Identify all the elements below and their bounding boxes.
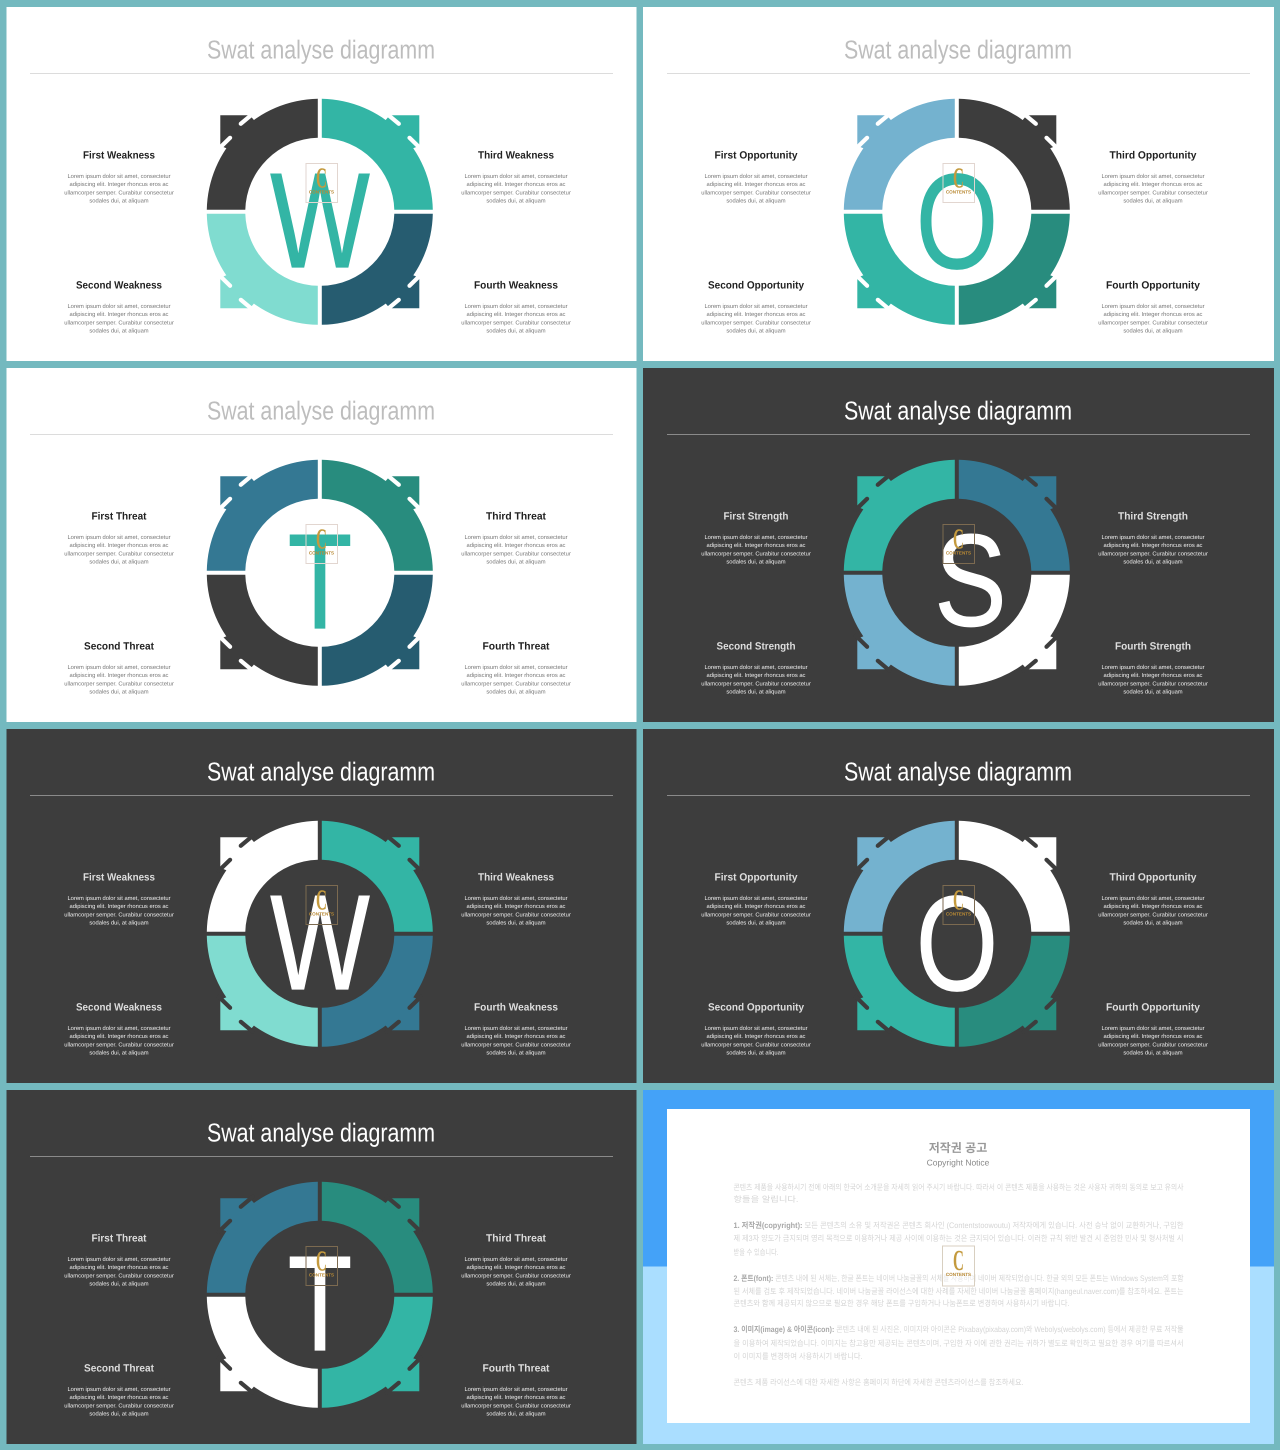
watermark: C bbox=[316, 1246, 327, 1278]
text: third opportunity: adipiscing elit. Integer rhoncus eros ac bbox=[1104, 181, 1203, 188]
text: second opportunity bbox=[701, 1002, 811, 1057]
text: image and icon section: 이 이미지를 변경하여 사용하시기 바랍니다. bbox=[734, 1352, 862, 1361]
text: second threat: adipiscing elit. Integer rhoncus eros ac bbox=[70, 1394, 169, 1401]
text: fourth threat: ullamcorper semper. Curabitur consectetur bbox=[461, 1402, 571, 1409]
text: third threat: adipiscing elit. Integer rhoncus eros ac bbox=[467, 542, 566, 549]
text: image and icon section: 을 이용하여 제작되었습니다. 이미지는 참고용만 제공되는 콘텐츠이며, 구입한 자 이에 관한 권리는 귀하가 별도로 확인하고 필요한 경우 여기를 따르셔서 bbox=[734, 1339, 1184, 1348]
text: fourth strength: adipiscing elit. Integer rhoncus eros ac bbox=[1104, 672, 1203, 679]
panel: O opportunity light bbox=[643, 7, 1274, 361]
text: fourth strength: sodales dui, at aliquam bbox=[1123, 689, 1183, 696]
text: fourth weakness: ullamcorper semper. Curabitur consectetur bbox=[461, 319, 571, 326]
text: third weakness: adipiscing elit. Integer rhoncus eros ac bbox=[467, 181, 566, 188]
ring diagram bbox=[844, 460, 1070, 686]
text: third strength: ullamcorper semper. Curabitur consectetur bbox=[1098, 550, 1208, 557]
text: fourth threat: adipiscing elit. Integer rhoncus eros ac bbox=[467, 1394, 566, 1401]
text: first strength: ullamcorper semper. Curabitur consectetur bbox=[701, 550, 811, 557]
text: third strength: Third Strength bbox=[1118, 510, 1188, 522]
text: first opportunity: First Opportunity bbox=[714, 150, 798, 162]
text: third opportunity: Third Opportunity bbox=[1110, 872, 1197, 884]
letter W: W bbox=[270, 145, 370, 296]
text: fourth opportunity: Lorem ipsum dolor sit amet, consectetur bbox=[1101, 303, 1205, 310]
text: second opportunity: sodales dui, at aliquam bbox=[726, 1050, 786, 1057]
text: first threat: Lorem ipsum dolor sit amet, consectetur bbox=[67, 1256, 171, 1263]
title: Swat analyse diagramm bbox=[207, 396, 435, 426]
text: first weakness: sodales dui, at aliquam bbox=[89, 198, 149, 205]
text: third weakness: ullamcorper semper. Curabitur consectetur bbox=[461, 189, 571, 196]
text: fourth opportunity: sodales dui, at aliquam bbox=[1123, 328, 1183, 335]
watermark bbox=[943, 162, 974, 202]
text: second weakness: Lorem ipsum dolor sit amet, consectetur bbox=[67, 1025, 171, 1032]
text: image and icon section: 3. 이미지(image) & 아이콘(icon): 콘텐츠 내에 된 사진은, 이미지와 아이콘은 Pixabay(pixabay.com)와 Webolys(webolys.com) 등에서 제공한 무료 저작물 bbox=[734, 1325, 1184, 1334]
text: third threat: sodales dui, at aliquam bbox=[486, 559, 546, 566]
text: second strength: Lorem ipsum dolor sit amet, consectetur bbox=[704, 664, 808, 671]
ring diagram bbox=[207, 99, 433, 325]
watermark: CONTENTS bbox=[309, 1272, 334, 1278]
watermark: CONTENTS bbox=[309, 912, 334, 916]
letter W: W bbox=[270, 867, 370, 1018]
text: second weakness bbox=[64, 280, 174, 335]
text: intro: 콘텐츠 제품을 사용하시기 전에 아래의 한국어 소개문을 자세히 읽어 주시기 바랍니다. 따라서 이 콘텐츠 제품을 사용하는 것은 사용자 귀하의 동의로 보고 유의사 bbox=[734, 1183, 1184, 1192]
text: first opportunity: ullamcorper semper. Curabitur consectetur bbox=[701, 911, 811, 918]
text: third threat: adipiscing elit. Integer rhoncus eros ac bbox=[467, 1264, 566, 1271]
text: first threat: First Threat bbox=[92, 510, 147, 522]
title: Swat analyse diagramm bbox=[844, 396, 1072, 426]
text: first opportunity bbox=[701, 872, 811, 927]
text: first threat bbox=[64, 510, 174, 566]
text: fourth threat: Lorem ipsum dolor sit amet, consectetur bbox=[464, 1386, 568, 1393]
text: third opportunity bbox=[1098, 150, 1208, 205]
text: third opportunity: ullamcorper semper. Curabitur consectetur bbox=[1098, 189, 1208, 196]
text: second weakness: sodales dui, at aliquam bbox=[89, 1050, 149, 1057]
text: second threat: sodales dui, at aliquam bbox=[89, 689, 149, 696]
text: fourth strength: ullamcorper semper. Curabitur consectetur bbox=[1098, 680, 1208, 687]
text: first opportunity bbox=[701, 150, 811, 205]
text: third weakness: Third Weakness bbox=[478, 872, 554, 884]
text: first threat bbox=[64, 1232, 174, 1288]
text: fourth strength bbox=[1098, 640, 1208, 696]
ring diagram bbox=[207, 460, 433, 686]
text: first opportunity: Lorem ipsum dolor sit amet, consectetur bbox=[704, 895, 808, 902]
text: third opportunity: Lorem ipsum dolor sit amet, consectetur bbox=[1101, 895, 1205, 902]
text: fourth threat bbox=[461, 1362, 571, 1418]
letter O: O bbox=[916, 146, 998, 297]
text: first weakness: ullamcorper semper. Curabitur consectetur bbox=[64, 911, 174, 918]
text: third weakness: Lorem ipsum dolor sit amet, consectetur bbox=[464, 895, 568, 902]
text: third strength: sodales dui, at aliquam bbox=[1123, 559, 1183, 566]
text: first opportunity: Lorem ipsum dolor sit amet, consectetur bbox=[704, 173, 808, 180]
text: first weakness: adipiscing elit. Integer rhoncus eros ac bbox=[70, 181, 169, 188]
text: second opportunity: Second Opportunity bbox=[708, 1002, 804, 1014]
text: fourth strength: Lorem ipsum dolor sit amet, consectetur bbox=[1101, 664, 1205, 671]
text: first weakness bbox=[64, 872, 174, 927]
watermark bbox=[306, 1246, 338, 1286]
text: second threat: adipiscing elit. Integer rhoncus eros ac bbox=[70, 672, 169, 679]
text: second threat: ullamcorper semper. Curabitur consectetur bbox=[64, 1402, 174, 1409]
text: first weakness: First Weakness bbox=[83, 150, 155, 162]
text: third strength: Lorem ipsum dolor sit amet, consectetur bbox=[1101, 534, 1205, 541]
text: intro bbox=[734, 1183, 1184, 1204]
text: third weakness bbox=[461, 150, 571, 205]
text: second opportunity: ullamcorper semper. Curabitur consectetur bbox=[701, 1041, 811, 1048]
panel: W weakness light bbox=[6, 7, 636, 361]
text: fourth strength: Fourth Strength bbox=[1115, 640, 1191, 652]
panel: S strength dark bbox=[643, 368, 1274, 722]
text: fourth weakness bbox=[461, 280, 571, 335]
panel: copyright notice bbox=[643, 1090, 1274, 1444]
watermark bbox=[306, 524, 338, 564]
text: second threat: ullamcorper semper. Curabitur consectetur bbox=[64, 680, 174, 687]
watermark: CONTENTS bbox=[946, 550, 971, 556]
text: fourth opportunity: Fourth Opportunity bbox=[1106, 1002, 1200, 1014]
heading: copyright notice: Copyright Notice bbox=[927, 1158, 990, 1168]
text: first strength: First Strength bbox=[724, 510, 788, 522]
watermark bbox=[306, 884, 338, 924]
text: intro: 항들을 알립니다. bbox=[734, 1195, 798, 1204]
text: third threat: ullamcorper semper. Curabitur consectetur bbox=[461, 1272, 571, 1279]
text: fourth opportunity: ullamcorper semper. Curabitur consectetur bbox=[1098, 319, 1208, 326]
text: second opportunity: adipiscing elit. Integer rhoncus eros ac bbox=[707, 1033, 806, 1040]
text: first weakness: sodales dui, at aliquam bbox=[89, 920, 149, 927]
text: first threat: adipiscing elit. Integer rhoncus eros ac bbox=[70, 542, 169, 549]
watermark: C bbox=[953, 524, 964, 556]
text: first strength bbox=[701, 510, 811, 566]
text: fourth threat: sodales dui, at aliquam bbox=[486, 1411, 546, 1418]
letter O: O bbox=[916, 868, 998, 1019]
text: fourth threat: ullamcorper semper. Curabitur consectetur bbox=[461, 680, 571, 687]
text: second threat bbox=[64, 640, 174, 696]
panel: O opportunity dark bbox=[643, 729, 1274, 1083]
title: Swat analyse diagramm bbox=[844, 34, 1072, 64]
panel: T threat dark bbox=[6, 1090, 636, 1444]
text: third threat: ullamcorper semper. Curabitur consectetur bbox=[461, 550, 571, 557]
text: third strength: adipiscing elit. Integer rhoncus eros ac bbox=[1104, 542, 1203, 549]
text: third threat: Lorem ipsum dolor sit amet, consectetur bbox=[464, 534, 568, 541]
text: second weakness bbox=[64, 1002, 174, 1057]
text: third opportunity: Lorem ipsum dolor sit amet, consectetur bbox=[1101, 173, 1205, 180]
text: first threat: adipiscing elit. Integer rhoncus eros ac bbox=[70, 1264, 169, 1271]
text: second strength: sodales dui, at aliquam bbox=[726, 689, 786, 696]
text: third opportunity: Third Opportunity bbox=[1110, 150, 1197, 162]
text: fourth weakness: sodales dui, at aliquam bbox=[486, 328, 546, 335]
text: fourth weakness: Fourth Weakness bbox=[474, 280, 558, 292]
text: copyright section: 제 제3자 양도가 금지되며 영리 목적으로 이용하거나 제공 사이에 이용하는 것은 금지되어 있습니다. 이러한 규칙 위반 발견 시 준엄한 민사 및 형사처벌 시 bbox=[734, 1234, 1184, 1243]
text: first weakness: Lorem ipsum dolor sit amet, consectetur bbox=[67, 895, 171, 902]
ring diagram bbox=[844, 821, 1070, 1047]
text: second threat: Lorem ipsum dolor sit amet, consectetur bbox=[67, 664, 171, 671]
text: third threat: Third Threat bbox=[486, 1232, 546, 1244]
text: fourth opportunity: adipiscing elit. Integer rhoncus eros ac bbox=[1104, 311, 1203, 318]
title: Swat analyse diagramm bbox=[207, 34, 435, 64]
text: second weakness: adipiscing elit. Integer rhoncus eros ac bbox=[70, 311, 169, 318]
watermark bbox=[943, 524, 974, 564]
text: first weakness: adipiscing elit. Integer rhoncus eros ac bbox=[70, 903, 169, 910]
text: third threat: sodales dui, at aliquam bbox=[486, 1281, 546, 1288]
text: first opportunity: adipiscing elit. Integer rhoncus eros ac bbox=[707, 181, 806, 188]
text: closing line: 콘텐츠 제품 라이선스에 대한 자세한 사항은 홈페이지 하단에 자세한 콘텐츠라이선스를 참조하세요. bbox=[734, 1378, 1024, 1387]
text: second weakness: sodales dui, at aliquam bbox=[89, 328, 149, 335]
text: second weakness: adipiscing elit. Integer rhoncus eros ac bbox=[70, 1033, 169, 1040]
watermark: C bbox=[316, 524, 327, 556]
text: copyright section: 받을 수 있습니다. bbox=[734, 1248, 778, 1257]
watermark: C bbox=[316, 162, 327, 194]
watermark: CONTENTS bbox=[309, 550, 334, 556]
text: font section: 콘텐츠와 함께 제공되지 않으므로 필요한 경우 해당 폰트를 구입하거나 나눔폰트로 변경하여 사용하시기 바랍니다. bbox=[734, 1299, 1070, 1308]
text: second strength: Second Strength bbox=[716, 640, 796, 652]
text: fourth threat: adipiscing elit. Integer rhoncus eros ac bbox=[467, 672, 566, 679]
text: second weakness: ullamcorper semper. Curabitur consectetur bbox=[64, 319, 174, 326]
text: third weakness: Lorem ipsum dolor sit amet, consectetur bbox=[464, 173, 568, 180]
text: second opportunity: Lorem ipsum dolor sit amet, consectetur bbox=[704, 1025, 808, 1032]
text: first opportunity: sodales dui, at aliquam bbox=[726, 920, 786, 927]
text: first threat: ullamcorper semper. Curabitur consectetur bbox=[64, 550, 174, 557]
text: third threat bbox=[461, 1232, 571, 1288]
text: fourth threat: Fourth Threat bbox=[482, 640, 550, 652]
text: first strength: sodales dui, at aliquam bbox=[726, 559, 786, 566]
watermark bbox=[942, 1245, 974, 1286]
panel: W weakness dark bbox=[6, 729, 636, 1083]
text: second opportunity: ullamcorper semper. Curabitur consectetur bbox=[701, 319, 811, 326]
text: second strength: ullamcorper semper. Curabitur consectetur bbox=[701, 680, 811, 687]
text: third opportunity: sodales dui, at aliquam bbox=[1123, 198, 1183, 205]
watermark: CONTENTS bbox=[946, 190, 971, 194]
text: first strength: Lorem ipsum dolor sit amet, consectetur bbox=[704, 534, 808, 541]
text: second threat: Second Threat bbox=[84, 1362, 154, 1374]
watermark bbox=[943, 884, 974, 924]
text: font section: 된 서체를 검토 후 제작되었습니다. 네이버 나눔글꼴 라이선스에 대한 사례를 자세한 네이버 나눔글꼴 홈페이지(hangeul.naver.com)를 참조하세요. 폰트는 bbox=[734, 1287, 1184, 1296]
text: second weakness: ullamcorper semper. Curabitur consectetur bbox=[64, 1041, 174, 1048]
watermark: CONTENTS bbox=[946, 912, 971, 916]
text: third opportunity: ullamcorper semper. Curabitur consectetur bbox=[1098, 911, 1208, 918]
text: fourth weakness: adipiscing elit. Integer rhoncus eros ac bbox=[467, 1033, 566, 1040]
ring diagram bbox=[207, 1182, 433, 1408]
text: third weakness: sodales dui, at aliquam bbox=[486, 920, 546, 927]
letter T: T bbox=[288, 1228, 352, 1379]
text: fourth weakness: ullamcorper semper. Curabitur consectetur bbox=[461, 1041, 571, 1048]
text: second opportunity: Lorem ipsum dolor sit amet, consectetur bbox=[704, 303, 808, 310]
text: second threat: sodales dui, at aliquam bbox=[89, 1411, 149, 1418]
watermark: C bbox=[953, 162, 964, 194]
title: Swat analyse diagramm bbox=[207, 1118, 435, 1148]
text: fourth opportunity: sodales dui, at aliquam bbox=[1123, 1050, 1183, 1057]
text: second strength: adipiscing elit. Integer rhoncus eros ac bbox=[707, 672, 806, 679]
text: third weakness: Third Weakness bbox=[478, 150, 554, 162]
text: second threat: Second Threat bbox=[84, 640, 154, 652]
text: third threat: Lorem ipsum dolor sit amet, consectetur bbox=[464, 1256, 568, 1263]
watermark: C bbox=[953, 1245, 964, 1277]
panel: T threat light bbox=[6, 368, 636, 722]
text: second threat bbox=[64, 1362, 174, 1418]
ring diagram bbox=[207, 821, 433, 1047]
text: first threat: sodales dui, at aliquam bbox=[89, 1281, 149, 1288]
text: fourth threat bbox=[461, 640, 571, 696]
text: fourth weakness: adipiscing elit. Integer rhoncus eros ac bbox=[467, 311, 566, 318]
text: second weakness: Second Weakness bbox=[76, 280, 162, 292]
text: fourth opportunity: Lorem ipsum dolor sit amet, consectetur bbox=[1101, 1025, 1205, 1032]
text: first weakness: ullamcorper semper. Curabitur consectetur bbox=[64, 189, 174, 196]
text: first weakness bbox=[64, 150, 174, 205]
text: fourth weakness: Lorem ipsum dolor sit amet, consectetur bbox=[464, 303, 568, 310]
text: first threat: Lorem ipsum dolor sit amet, consectetur bbox=[67, 534, 171, 541]
text: fourth weakness: Fourth Weakness bbox=[474, 1002, 558, 1014]
letter S: S bbox=[934, 507, 1007, 654]
text: first opportunity: adipiscing elit. Integer rhoncus eros ac bbox=[707, 903, 806, 910]
text: first threat: First Threat bbox=[92, 1232, 147, 1244]
text: second opportunity: Second Opportunity bbox=[708, 280, 804, 292]
text: first weakness: Lorem ipsum dolor sit amet, consectetur bbox=[67, 173, 171, 180]
text: copyright section bbox=[734, 1221, 1184, 1257]
text: first strength: adipiscing elit. Integer rhoncus eros ac bbox=[707, 542, 806, 549]
text: second strength bbox=[701, 640, 811, 696]
watermark: CONTENTS bbox=[309, 190, 334, 194]
heading: korean title: 저작권 공고 bbox=[929, 1141, 987, 1155]
text: first threat: ullamcorper semper. Curabitur consectetur bbox=[64, 1272, 174, 1279]
text: first opportunity: ullamcorper semper. Curabitur consectetur bbox=[701, 189, 811, 196]
text: fourth threat: Lorem ipsum dolor sit amet, consectetur bbox=[464, 664, 568, 671]
text: third weakness bbox=[461, 872, 571, 927]
text: first opportunity: First Opportunity bbox=[714, 872, 798, 884]
text: fourth weakness bbox=[461, 1002, 571, 1057]
text: third threat bbox=[461, 510, 571, 566]
text: third opportunity: adipiscing elit. Integer rhoncus eros ac bbox=[1104, 903, 1203, 910]
text: fourth opportunity bbox=[1098, 280, 1208, 335]
text: fourth opportunity: Fourth Opportunity bbox=[1106, 280, 1200, 292]
text: second opportunity bbox=[701, 280, 811, 335]
text: first threat: sodales dui, at aliquam bbox=[89, 559, 149, 566]
text: second opportunity: sodales dui, at aliquam bbox=[726, 328, 786, 335]
text: second opportunity: adipiscing elit. Integer rhoncus eros ac bbox=[707, 311, 806, 318]
text: third opportunity bbox=[1098, 872, 1208, 927]
text: font section bbox=[734, 1274, 1184, 1308]
text: fourth opportunity: adipiscing elit. Integer rhoncus eros ac bbox=[1104, 1033, 1203, 1040]
title: Swat analyse diagramm bbox=[844, 756, 1072, 786]
text: fourth threat: sodales dui, at aliquam bbox=[486, 689, 546, 696]
text: second weakness: Lorem ipsum dolor sit amet, consectetur bbox=[67, 303, 171, 310]
watermark: CONTENTS bbox=[946, 1272, 971, 1277]
text: second weakness: Second Weakness bbox=[76, 1002, 162, 1014]
title: Swat analyse diagramm bbox=[207, 756, 435, 786]
watermark: C bbox=[316, 884, 327, 916]
text: first opportunity: sodales dui, at aliquam bbox=[726, 198, 786, 205]
text: third strength bbox=[1098, 510, 1208, 566]
text: fourth opportunity bbox=[1098, 1002, 1208, 1057]
watermark: C bbox=[953, 884, 964, 916]
watermark bbox=[306, 162, 338, 202]
text: third weakness: adipiscing elit. Integer rhoncus eros ac bbox=[467, 903, 566, 910]
text: second threat: Lorem ipsum dolor sit amet, consectetur bbox=[67, 1386, 171, 1393]
text: fourth weakness: Lorem ipsum dolor sit amet, consectetur bbox=[464, 1025, 568, 1032]
text: fourth threat: Fourth Threat bbox=[482, 1362, 550, 1374]
text: fourth weakness: sodales dui, at aliquam bbox=[486, 1050, 546, 1057]
text: fourth opportunity: ullamcorper semper. Curabitur consectetur bbox=[1098, 1041, 1208, 1048]
text: third weakness: ullamcorper semper. Curabitur consectetur bbox=[461, 911, 571, 918]
text: copyright section: 1. 저작권(copyright): 모든 콘텐츠의 소유 및 저작권은 콘텐츠 회사인 (Contentstoowoutu) 저작자에게 있습니다. 사전 승낙 없이 교환하거나, 구입한 bbox=[734, 1221, 1184, 1230]
text: third opportunity: sodales dui, at aliquam bbox=[1123, 920, 1183, 927]
text: font section: 2. 폰트(font): 콘텐츠 내에 된 서체는, 한글 폰트는 네이버 나눔글꼴의 서체를 사용하며 네이버 제작되었습니다. 한글 외의 모든 폰트는 Windows System의 포함 bbox=[734, 1274, 1184, 1283]
letter T: T bbox=[288, 506, 352, 657]
text: third threat: Third Threat bbox=[486, 510, 546, 522]
text: first weakness: First Weakness bbox=[83, 872, 155, 884]
text: third weakness: sodales dui, at aliquam bbox=[486, 198, 546, 205]
ring diagram bbox=[844, 99, 1070, 325]
text: image and icon section bbox=[734, 1325, 1184, 1361]
